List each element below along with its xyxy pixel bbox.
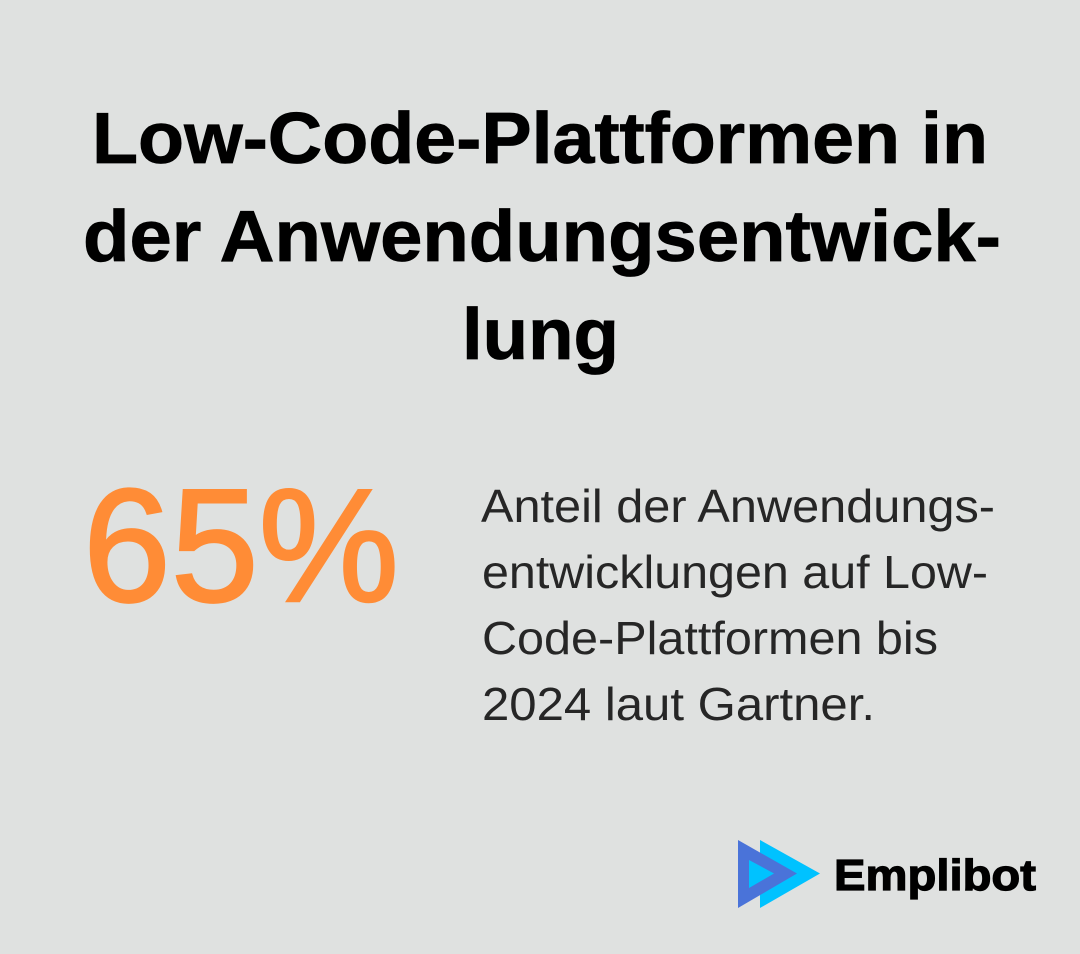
title: der Anwendungsentwick- [83,197,1001,277]
description text: entwicklungen auf Low- [482,546,988,598]
description text: Anteil der Anwendungs- [481,480,995,532]
logo wordmark: Emplibot [834,851,1036,900]
description text: Code-Plattformen bis [482,612,938,664]
logo: Emplibot [738,840,1036,908]
title: Low-Code-Plattformen in [92,99,988,179]
description text: 2024 laut Gartner. [482,678,875,730]
description text [481,480,995,730]
icon: play triangles [738,840,820,908]
title: lung [462,295,619,375]
statistic: 65%: 65% [83,456,399,636]
title [83,99,1001,375]
